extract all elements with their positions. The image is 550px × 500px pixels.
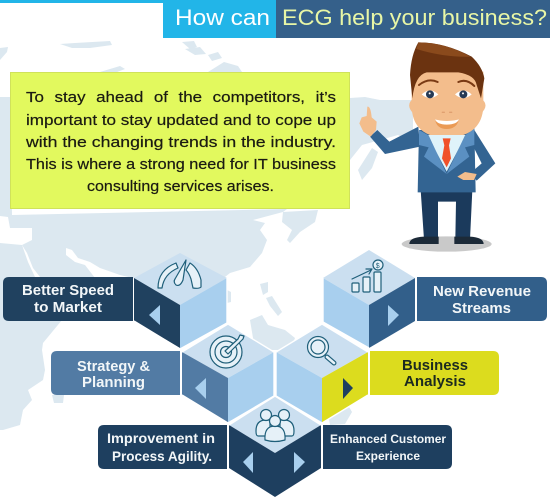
floor shadow (402, 236, 492, 252)
callout paragraph (25, 90, 336, 195)
title (163, 0, 550, 38)
callout background (10, 72, 350, 208)
label background (51, 351, 180, 395)
shoes (409, 237, 484, 244)
target ring inner (215, 341, 237, 363)
top face (323, 250, 415, 305)
handle (327, 357, 334, 363)
shirt (427, 135, 466, 172)
handle inner (327, 357, 334, 363)
lapels (419, 128, 474, 174)
dollar sign: $ (376, 263, 380, 270)
front head (270, 416, 280, 426)
lens inner (311, 340, 325, 354)
icon: speed gauge (158, 260, 201, 288)
pointing hand (359, 107, 377, 137)
head (409, 42, 485, 135)
dark face (134, 278, 180, 348)
eye highlights (429, 92, 464, 94)
cube: customer team (229, 396, 321, 497)
cube: new revenue (323, 250, 415, 348)
front person (265, 426, 285, 442)
body (359, 107, 495, 252)
light face (228, 352, 274, 423)
pointing arm (370, 127, 420, 154)
label: new revenue streams (417, 277, 547, 321)
label: better speed to market (3, 277, 133, 321)
label line 1: Strategy & (77, 359, 151, 375)
line 4: This is where a strong need for IT business (26, 157, 336, 173)
arrow (343, 378, 353, 399)
back left person (256, 420, 270, 436)
right face (275, 425, 321, 497)
target bullseye (220, 346, 232, 358)
growth arrow (352, 269, 372, 279)
label: business analysis (370, 351, 499, 395)
title right panel (276, 0, 550, 38)
ears (409, 98, 485, 113)
title text: how can: How can (175, 5, 270, 30)
label line 2: Experience (356, 451, 420, 463)
businessman character (359, 42, 495, 252)
gauge right band (186, 263, 201, 288)
label line 1: New Revenue (433, 284, 531, 300)
arrow (388, 305, 399, 326)
tie (442, 138, 451, 167)
label line 2: to Market (34, 300, 102, 316)
label line 2: Analysis (404, 374, 466, 390)
arm gap (475, 156, 481, 167)
top face (229, 396, 321, 453)
left face (182, 352, 228, 423)
title text: ECG: ECG help your business? (282, 5, 547, 30)
jacket body (418, 128, 476, 192)
hair (410, 42, 484, 98)
label background (323, 425, 452, 469)
back left head (260, 410, 272, 420)
line 2: important to stay updated and to cope up (26, 113, 336, 129)
light face (323, 278, 369, 348)
label line 2: Planning (82, 375, 145, 391)
yellow face (322, 352, 368, 423)
hand on hip (457, 172, 477, 180)
eyebrows (419, 80, 474, 86)
top face (182, 324, 274, 378)
right arrow (294, 452, 305, 473)
dollar coin (373, 260, 383, 270)
cube: better speed (134, 253, 227, 349)
left face (229, 425, 275, 497)
background world map (0, 41, 413, 430)
pupils (426, 90, 467, 98)
label background (98, 425, 227, 469)
cube separators (134, 278, 369, 425)
right arm (470, 128, 495, 181)
label line 2: Streams (452, 301, 511, 317)
icon: target (210, 335, 244, 368)
light face (180, 278, 227, 349)
top face (276, 324, 368, 378)
label line 1: Improvement in (107, 430, 215, 446)
cube: business analysis (276, 324, 368, 423)
hair highlight (416, 42, 470, 57)
lens (308, 336, 328, 358)
label background (3, 277, 133, 321)
line 3: with the changing trends in the industry. (25, 135, 336, 151)
nose (442, 110, 452, 114)
label background (417, 277, 547, 321)
top accent strip (0, 0, 163, 3)
gauge left band (158, 263, 178, 288)
target rings (210, 336, 242, 368)
label: strategy and planning (51, 351, 180, 395)
trousers (421, 190, 472, 239)
back right head (278, 410, 290, 420)
callout: intro text box (10, 72, 350, 208)
teeth (435, 119, 459, 125)
label: enhanced customer experience (323, 425, 452, 469)
mouth (435, 119, 459, 129)
gauge needle (174, 260, 186, 285)
label: improvement in process agility (98, 425, 227, 469)
label line 1: Better Speed (22, 283, 114, 299)
bars (352, 272, 381, 292)
eye whites (422, 90, 472, 98)
label line 1: Enhanced Customer (330, 434, 447, 446)
top face (134, 253, 227, 305)
target arrow (225, 335, 244, 354)
line 1: To stay ahead of the competitors, it’s (26, 90, 336, 106)
dark face (369, 278, 415, 348)
cube: strategy (182, 324, 274, 423)
icon: magnifier (308, 336, 334, 363)
label line 2: Process Agility. (112, 448, 212, 464)
left arrow (243, 452, 253, 473)
line 5: consulting services arises. (87, 179, 274, 195)
label background (370, 351, 499, 395)
arrow (149, 305, 160, 325)
arrow (195, 378, 206, 399)
back right person (280, 420, 294, 436)
light face (276, 352, 322, 423)
title left panel (163, 0, 276, 38)
icon: people (256, 410, 294, 442)
face (412, 72, 483, 135)
label line 1: Business (402, 358, 468, 374)
